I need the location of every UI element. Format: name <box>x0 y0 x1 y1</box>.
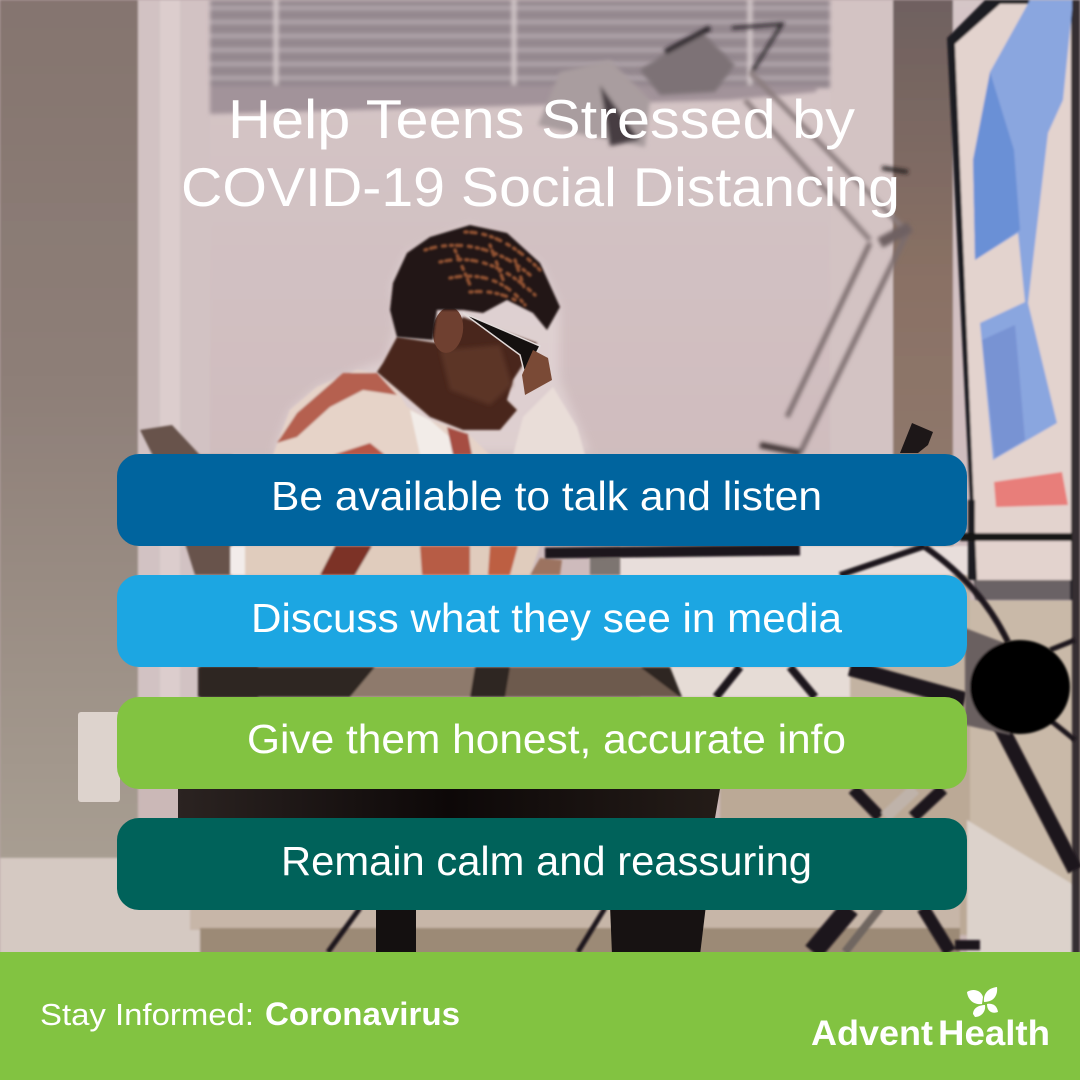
tip bar: discuss media <box>117 575 967 667</box>
tip bar: calm and reassuring <box>117 818 967 910</box>
black trousers <box>178 789 720 818</box>
sweater <box>200 370 682 697</box>
desk and table legs <box>328 546 1075 952</box>
ear <box>430 305 466 355</box>
title <box>181 88 900 218</box>
hand on forehead <box>522 350 552 395</box>
title: COVID-19 Social Distancing <box>181 156 900 218</box>
tip bar: honest info: Give them honest, accurate info <box>247 716 846 762</box>
tip bar: talk and listen <box>117 454 967 546</box>
tip bar: honest info <box>117 697 967 789</box>
desk cylinder <box>965 628 1070 735</box>
wall outlet <box>78 712 120 802</box>
desk lamp <box>538 24 910 453</box>
logo: AdventHealth <box>811 987 1050 1053</box>
chair <box>140 425 258 697</box>
footer band <box>0 952 1080 1080</box>
logo wordmark: Health <box>938 1014 1050 1053</box>
icon: four-petal flower <box>967 987 998 1017</box>
teen figure <box>140 225 720 955</box>
neck and face <box>377 317 537 430</box>
tip bar: talk and listen: Be available to talk and listen <box>271 473 822 519</box>
soft halo <box>273 225 590 453</box>
footer text: stay informed: Coronavirus <box>265 996 460 1032</box>
hair <box>390 225 560 340</box>
logo wordmark: Advent <box>811 1014 933 1053</box>
footer text: stay informed <box>40 996 460 1032</box>
wall picture frame <box>947 0 1080 955</box>
desk clamp bracket <box>900 423 933 453</box>
tip bar: discuss media: Discuss what they see in media <box>251 595 842 641</box>
trouser leg and stool post <box>376 905 706 955</box>
tip bar: calm and reassuring: Remain calm and reassuring <box>281 838 812 884</box>
cheek shading <box>440 345 512 405</box>
logo wordmark <box>811 1014 1050 1053</box>
footer text: stay informed: Stay Informed: <box>40 997 254 1032</box>
window blinds <box>210 0 830 114</box>
glasses <box>463 313 540 375</box>
title: Help Teens Stressed by <box>228 88 856 150</box>
